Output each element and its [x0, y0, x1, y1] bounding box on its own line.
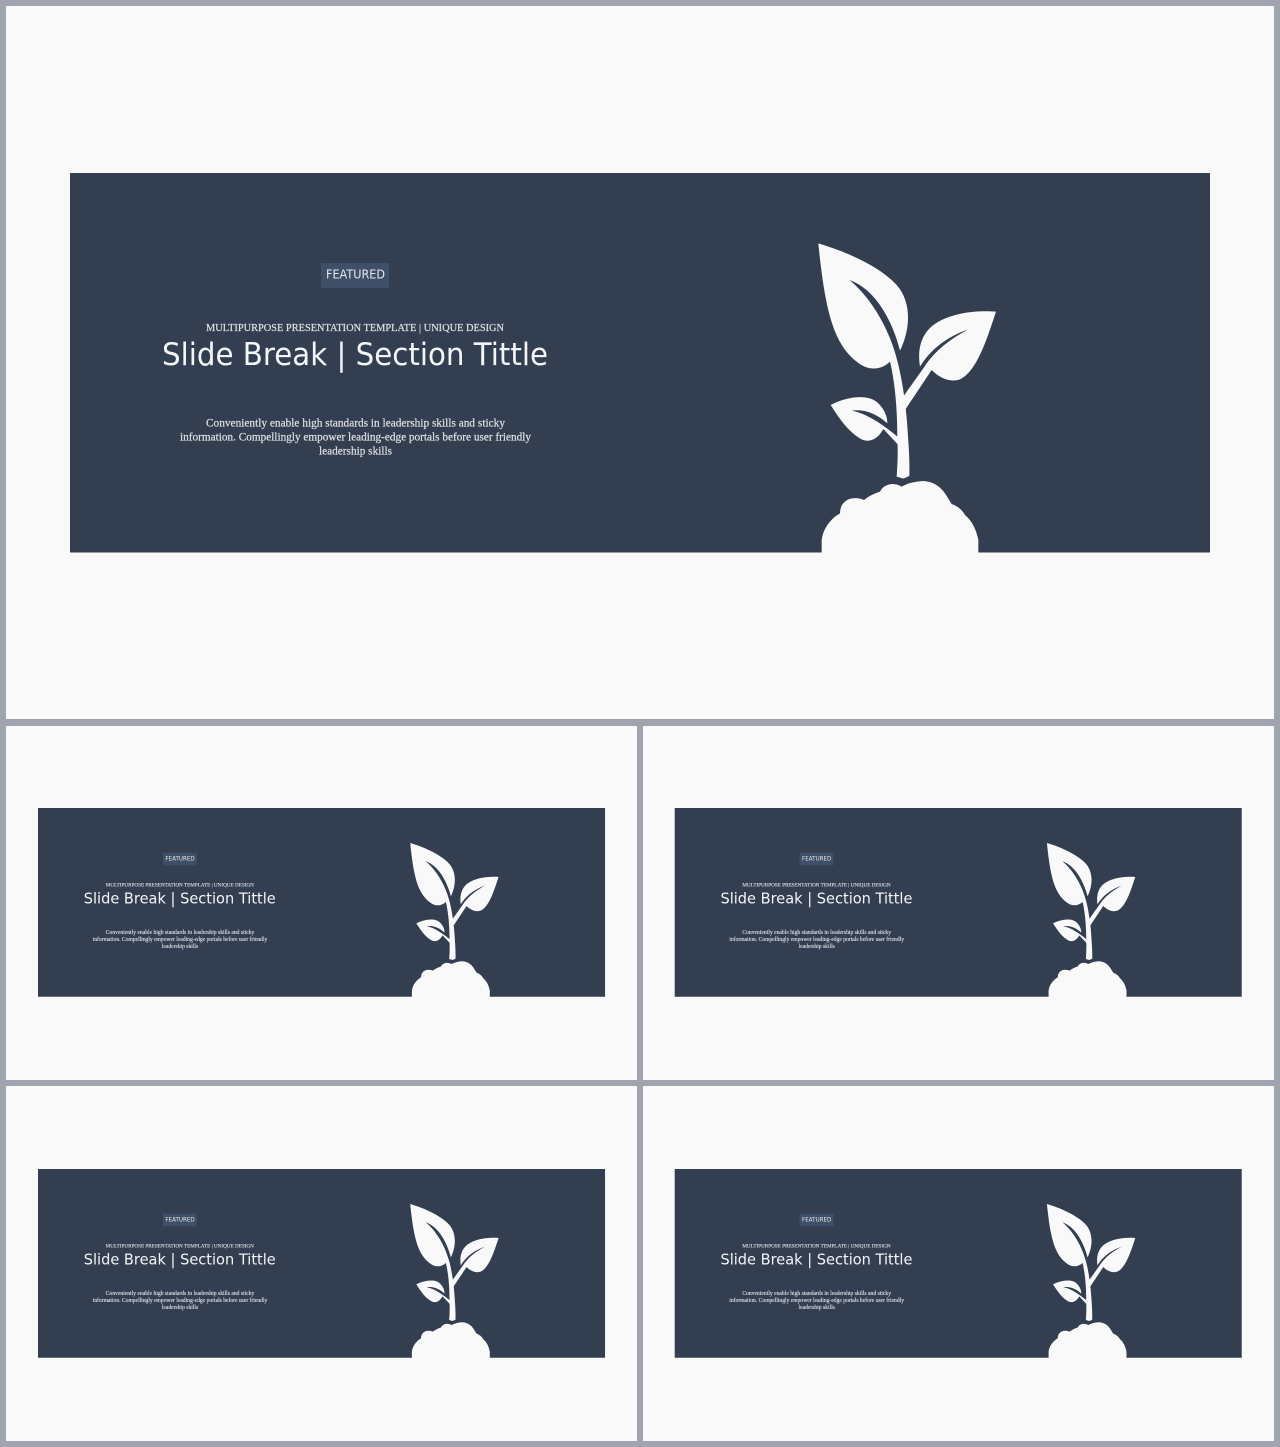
panel: slide 2 content: MULTIPURPOSE PRESENTATION TEMPLATE | UNIQUE DESIGN — [106, 883, 254, 889]
slide 1: large featured slide — [6, 6, 1274, 719]
panel: slide 4 content: FEATURED — [165, 1216, 195, 1223]
panel: slide 5 content: FEATURED — [802, 1216, 832, 1223]
panel: slide 5 content: MULTIPURPOSE PRESENTATION TEMPLATE | UNIQUE DESIGN — [742, 1244, 891, 1250]
panel: slide 3 content: Conveniently enable high standards in leadership skills and sticky — [742, 930, 891, 936]
panel: slide 2 content: FEATURED — [165, 855, 195, 862]
panel: dark banner — [70, 173, 1210, 552]
slide 5: small slide bottom right — [643, 1086, 1274, 1441]
subtitle: MULTIPURPOSE PRESENTATION TEMPLATE | UNIQUE DESIGN — [206, 323, 504, 334]
slide 3: small slide top right — [643, 726, 1274, 1080]
panel: slide 4 content — [38, 1169, 605, 1358]
slide 2: small slide top left — [6, 726, 637, 1080]
panel: slide 3 content: FEATURED — [802, 855, 832, 862]
panel: slide 2 content: Conveniently enable high standards in leadership skills and sticky — [106, 930, 254, 936]
panel: slide 2 content: leadership skills — [162, 944, 199, 950]
panel: slide 4 content: information. Compellingly empower leading-edge portals before user friendly — [93, 1297, 267, 1304]
panel: slide 4 content: leadership skills — [162, 1305, 199, 1311]
icon: sprouting plant — [818, 243, 996, 553]
slide 4: small slide bottom left — [6, 1086, 637, 1441]
badge: featured — [321, 263, 389, 288]
panel: slide 3 content: information. Compellingly empower leading-edge portals before user friendly — [729, 936, 904, 943]
panel: slide 3 content: Slide Break | Section Tittle — [720, 890, 912, 908]
panel: slide 5 content: Conveniently enable high standards in leadership skills and sticky — [742, 1291, 891, 1297]
body text: Conveniently enable high standards in leadership skills and sticky — [206, 418, 505, 430]
panel: slide 5 content: leadership skills — [799, 1305, 836, 1311]
panel: slide 5 content — [675, 1169, 1242, 1358]
panel: slide 5 content: Slide Break | Section Tittle — [720, 1251, 912, 1269]
heading: Slide Break | Section Tittle — [162, 337, 548, 373]
body text: leadership skills — [319, 446, 393, 458]
panel: slide 2 content: information. Compellingly empower leading-edge portals before user friendly — [93, 936, 267, 943]
body text: information. Compellingly empower leading-edge portals before user friendly — [180, 432, 531, 444]
panel: slide 4 content: Conveniently enable high standards in leadership skills and sticky — [106, 1291, 254, 1297]
panel: slide 5 content: information. Compellingly empower leading-edge portals before user friendly — [729, 1297, 904, 1304]
panel: slide 2 content: Slide Break | Section Tittle — [84, 890, 276, 908]
panel: slide 4 content: MULTIPURPOSE PRESENTATION TEMPLATE | UNIQUE DESIGN — [106, 1244, 254, 1250]
panel: slide 3 content: MULTIPURPOSE PRESENTATION TEMPLATE | UNIQUE DESIGN — [742, 883, 891, 889]
panel: slide 3 content — [675, 808, 1242, 997]
body text — [180, 418, 531, 458]
panel: slide 2 content — [38, 808, 605, 997]
panel: slide 4 content: Slide Break | Section Tittle — [84, 1251, 276, 1269]
badge: featured: FEATURED — [326, 266, 385, 282]
panel: slide 3 content: leadership skills — [799, 944, 836, 950]
